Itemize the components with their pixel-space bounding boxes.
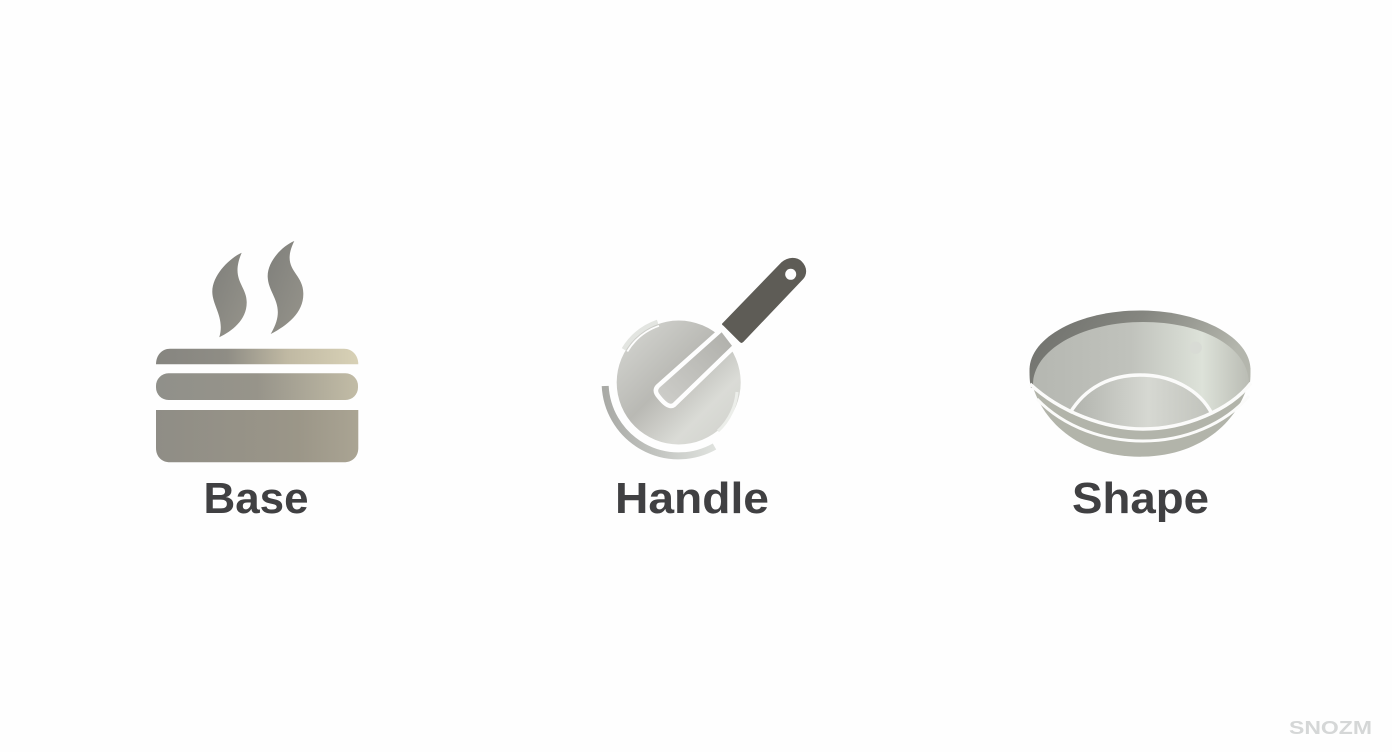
panel: base [156,241,358,523]
icon: outer rim arc [605,386,714,456]
icon: inner basin [1070,375,1212,429]
icon: stacked base layers [156,349,358,462]
icon: dark handle grip [721,257,807,344]
panel: handle [605,257,807,523]
icon: basin rim [1070,375,1212,414]
icon: steam [212,241,303,337]
icon: bowl rim lines [1030,383,1251,441]
icon: highlight [1190,342,1202,354]
label: Shape: Shape [1072,474,1209,523]
icon: bowl [1030,310,1251,457]
panel: shape [1030,310,1251,523]
watermark: SNOZM [1289,718,1372,738]
label: Base: Base [204,474,308,523]
icon: pan disc [617,320,741,444]
label: Handle: Handle [615,474,769,523]
icon: pan handle neck [656,329,735,406]
icon: handle hole [785,269,796,280]
